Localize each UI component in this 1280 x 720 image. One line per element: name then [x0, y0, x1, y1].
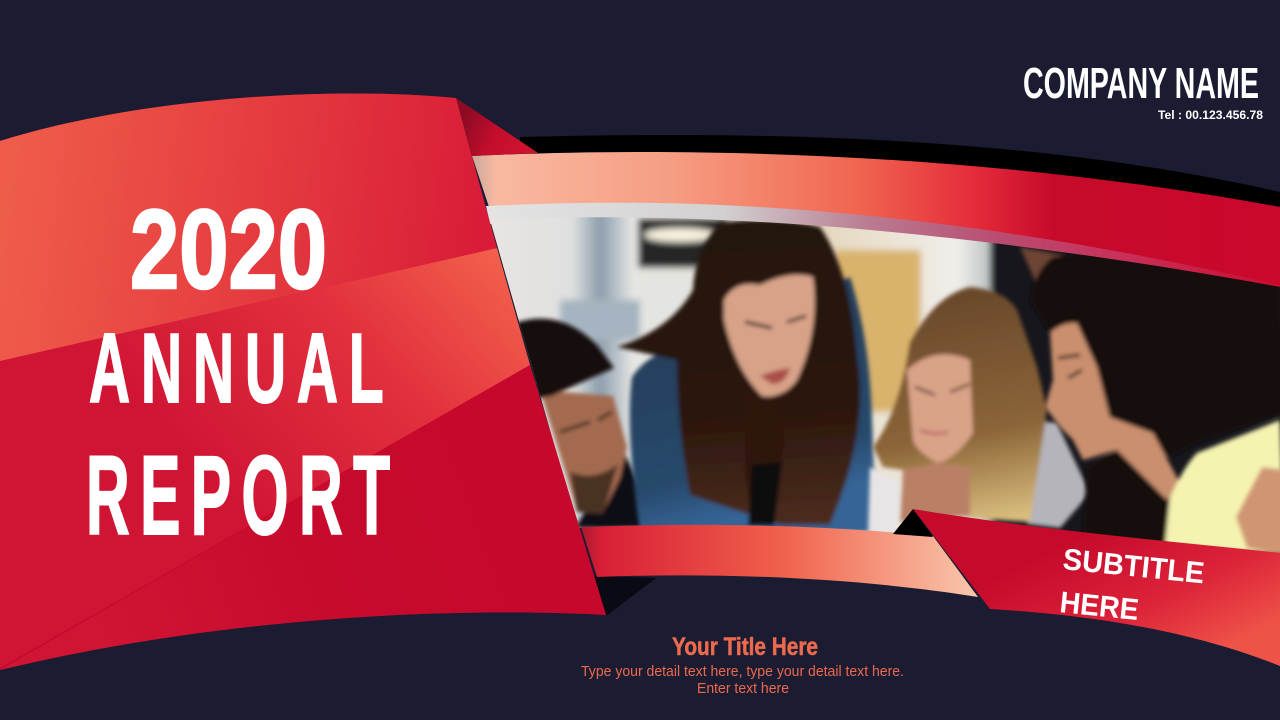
man figure [518, 315, 642, 528]
light strip above photo [486, 203, 1280, 292]
panel heading: 2020 [130, 187, 327, 312]
curly haired woman [1020, 247, 1280, 556]
blurred office background [491, 217, 1280, 532]
subtitle text: HERE [1058, 586, 1140, 627]
blonde woman [868, 287, 1090, 534]
footer title and detail text: Enter text here [697, 680, 789, 697]
company name: Tel : 00.123.456.78 [1158, 110, 1264, 122]
footer title and detail text [581, 633, 904, 697]
subtitle text: SUBTITLE [1061, 543, 1206, 590]
woman in denim jacket [617, 220, 876, 532]
lower ribbon band [581, 525, 978, 597]
panel heading [86, 187, 390, 559]
top ribbon band [472, 152, 1280, 290]
subtitle text [1058, 543, 1206, 627]
panel heading: REPORT [86, 434, 390, 559]
footer title and detail text: Your Title Here [672, 633, 818, 661]
panel heading: ANNUAL [89, 313, 384, 423]
subtitle ribbon [913, 509, 1280, 666]
black notch triangle [893, 509, 933, 537]
lower dark fold shadow [590, 576, 656, 616]
main red panel [0, 93, 606, 670]
footer title and detail text: Type your detail text here, type your detail text here. [581, 663, 904, 680]
photograph stand-in [491, 217, 1280, 553]
fold corner [456, 98, 538, 156]
black shadow behind top band [520, 135, 1280, 225]
